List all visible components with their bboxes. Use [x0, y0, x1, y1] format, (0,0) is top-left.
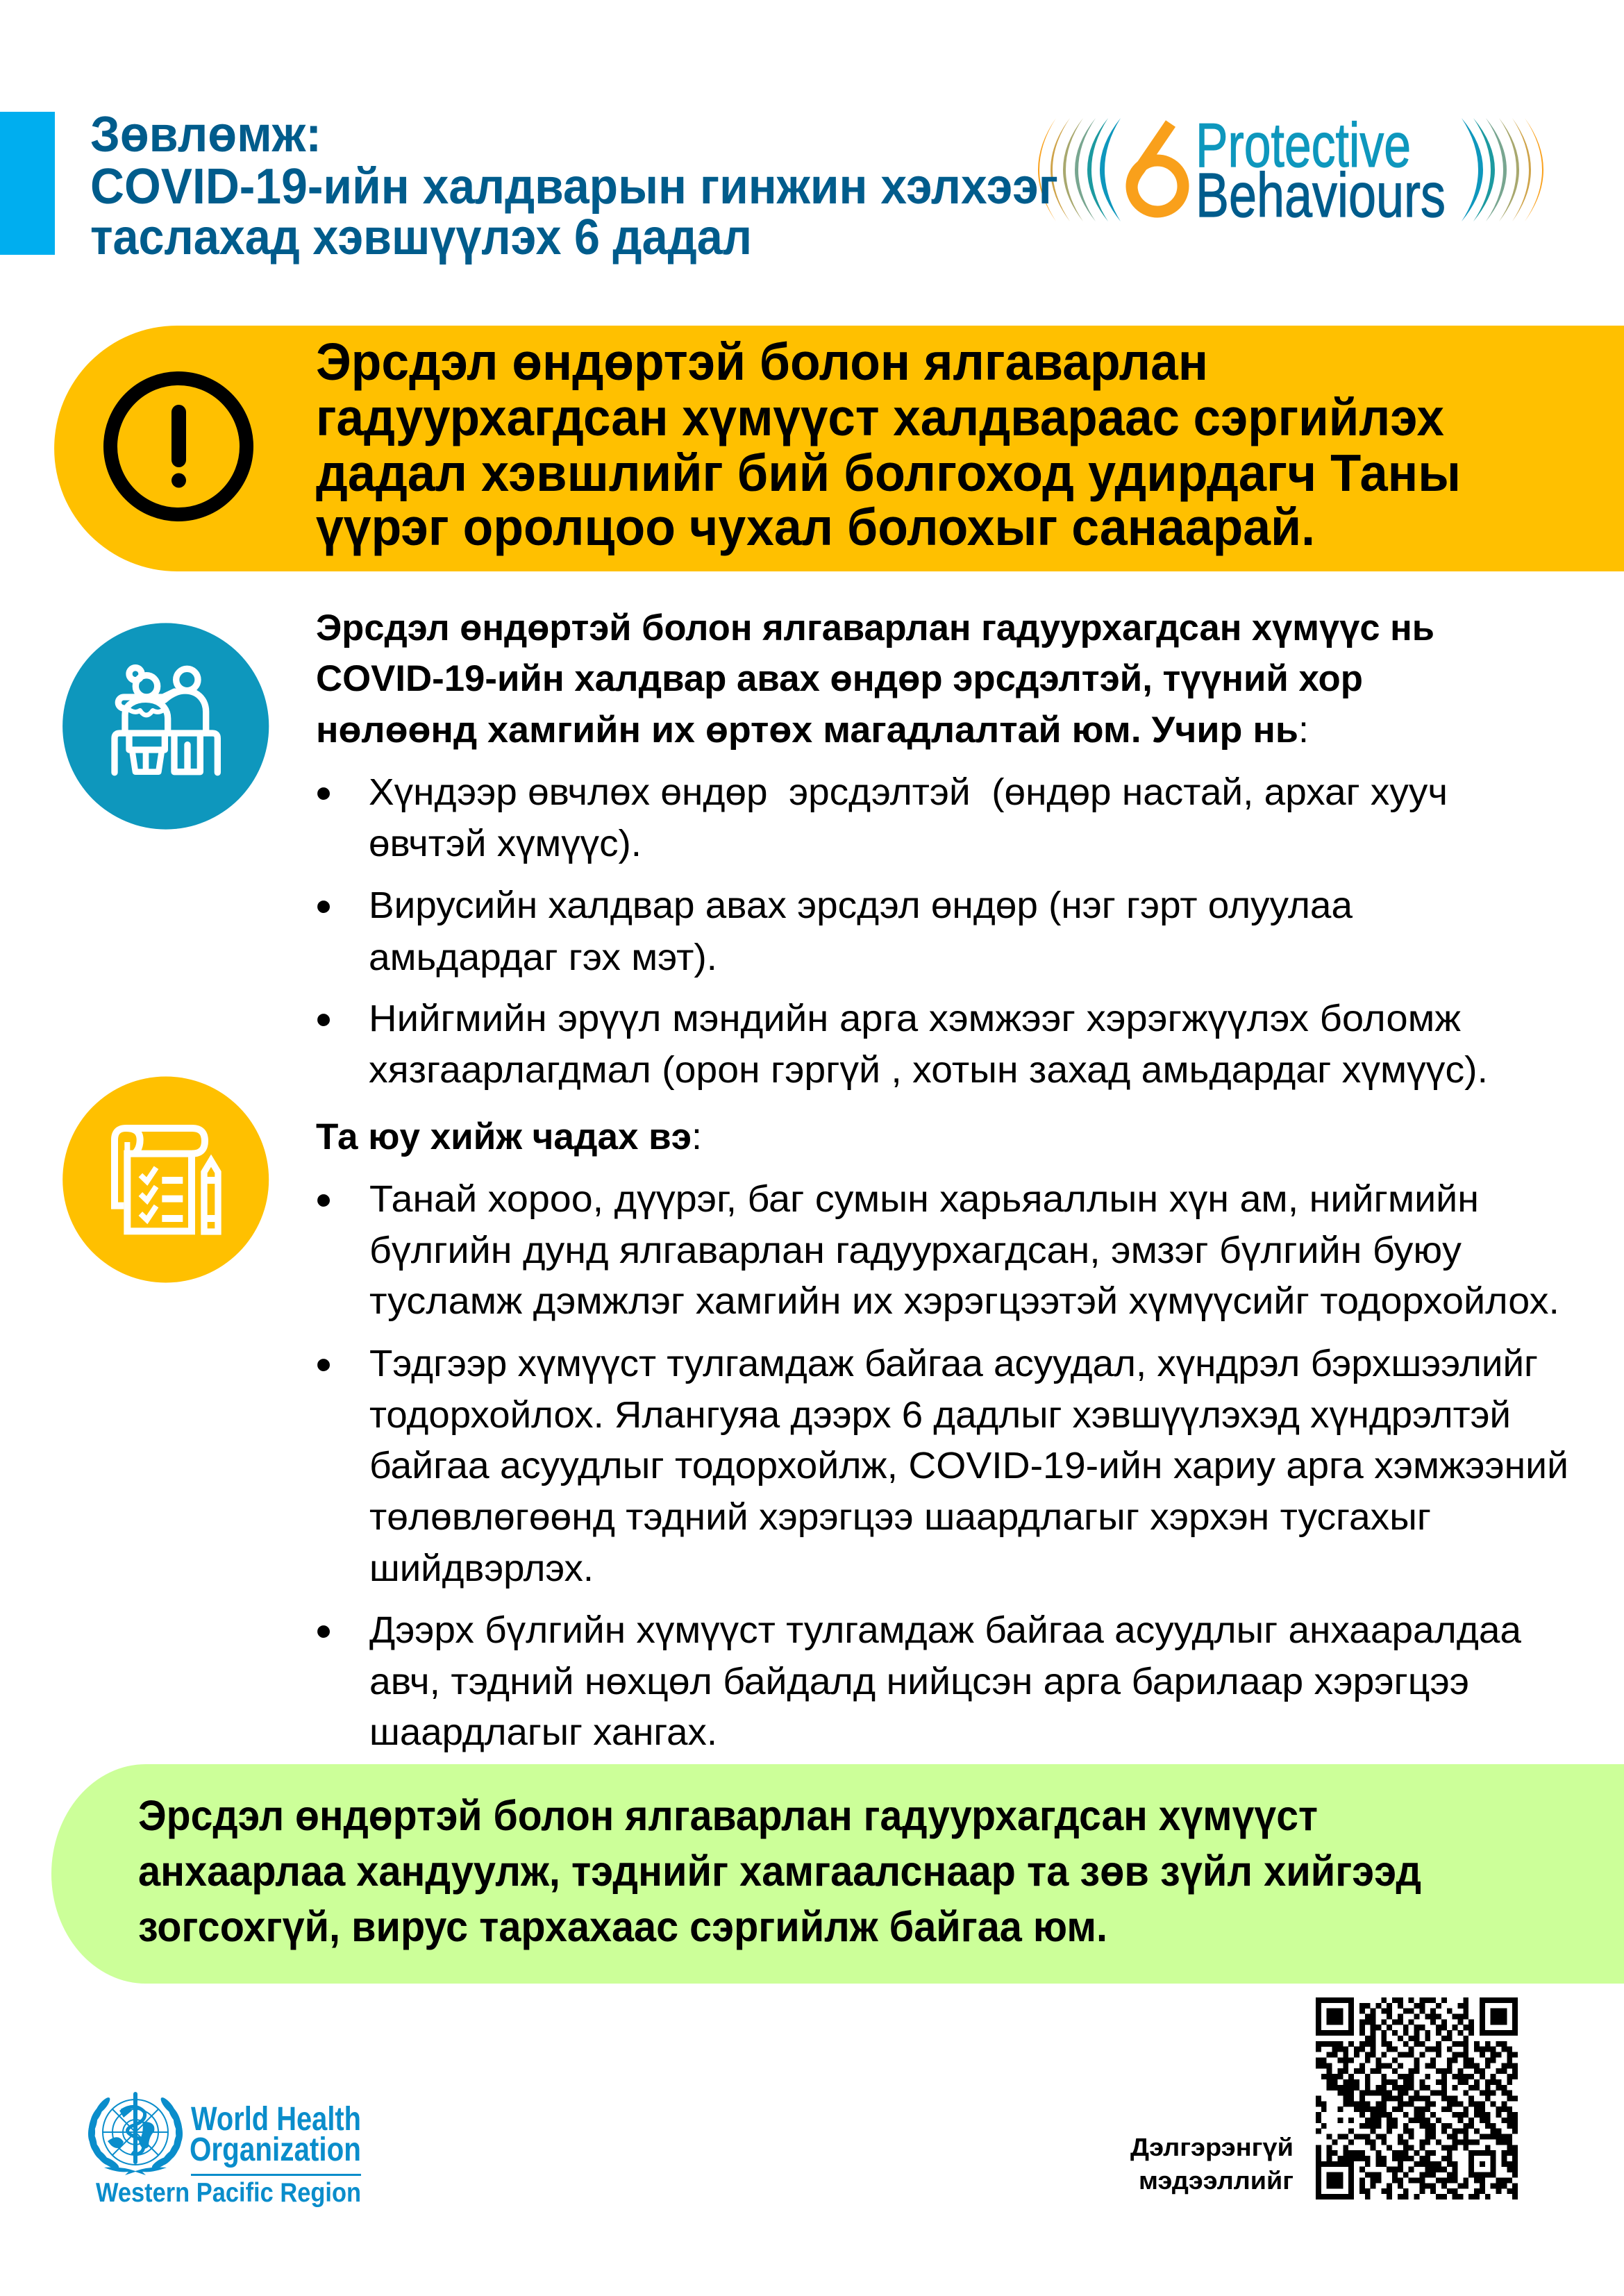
bullet list: actions: төлөвлөгөөнд тэдний хэрэгцээ шаардлагыг хэрхэн тусгахыг [369, 1496, 1431, 1538]
panel: green call to action [51, 1764, 1624, 1984]
bullet list: actions: • [315, 1605, 332, 1657]
bullet list: risk groups: өвчтэй хүмүүс). [369, 823, 642, 864]
logo: 6 Protective Behaviours: Protective [1196, 111, 1411, 181]
call to action text: зогсохгүй, вирус тархахаас сэргийлж байгаа юм. [138, 1903, 1107, 1950]
bullet list: actions: байгаа асуудлыг тодорхойлж, COVID-19-ийн хариу арга хэмжээний [369, 1445, 1568, 1486]
bullet list: actions: шаардлагыг хангах. [369, 1711, 717, 1753]
more information label: мэдээллийг [1139, 2166, 1294, 2195]
text block: why people are at risk: : [1298, 709, 1309, 751]
bullet list: risk groups: хязгаарлагдмал (орон гэргүй , хотын захад амьдардаг хүмүүс). [369, 1049, 1488, 1091]
bullet list: actions: бүлгийн дунд ялгаварлан гадуурхагдсан, эмзэг бүлгийн буюу [369, 1230, 1462, 1271]
panel: yellow warning banner [54, 326, 1624, 571]
right sound arcs [1462, 118, 1543, 221]
bullet list: actions: авч, тэдний нөхцөл байдалд нийцсэн арга барилаар хэрэгцээ [369, 1661, 1469, 1702]
bullet list: risk groups: амьдардаг гэх мэт). [369, 937, 717, 978]
logo: 6 Protective Behaviours: Behaviours [1196, 161, 1446, 231]
bullet list: actions: • [315, 1339, 332, 1390]
logo: 6 Protective Behaviours [1038, 111, 1543, 231]
banner text: дадал хэвшлийг бий болгоход удирдагч Таны [316, 444, 1461, 502]
heading: what you can do: Та юу хийж чадах вэ [316, 1116, 692, 1157]
numeral 6 [1132, 124, 1183, 212]
logo: World Health Organization [87, 2092, 361, 2208]
call to action text: Эрсдэл өндөртэй болон ялгаварлан гадуурхагдсан хүмүүст [138, 1792, 1318, 1839]
bullet list: actions: Тэдгээр хүмүүст тулгамдаж байгаа асуудал, хүндрэл бэрхшээлийг [369, 1343, 1538, 1384]
bullet list: actions: шийдвэрлэх. [369, 1548, 594, 1589]
WHO emblem [87, 2092, 184, 2175]
icon: exclamation mark [110, 378, 246, 514]
logo: World Health Organization: Western Pacific Region [96, 2178, 361, 2208]
bullet list: risk groups: • [315, 994, 332, 1045]
logo: World Health Organization: World Health [191, 2101, 361, 2138]
bullet list: risk groups: • [315, 767, 332, 819]
heading: what you can do: : [692, 1116, 702, 1157]
bullet list: actions [315, 1174, 1568, 1753]
banner text: үүрэг оролцоо чухал болохыг санаарай. [316, 498, 1315, 556]
bullet list: risk groups: Нийгмийн эрүүл мэндийн арга хэмжээг хэрэгжүүлэх боломж [369, 998, 1461, 1039]
logo: World Health Organization: Organization [190, 2131, 361, 2168]
bullet list: actions: Дээрх бүлгийн хүмүүст тулгамдаж байгаа асуудлыг анхааралдаа [369, 1609, 1522, 1651]
left sound arcs [1038, 118, 1121, 221]
bullet list: actions: тодорхойлох. Ялангуяа дээрх 6 дадлыг хэвшүүлэхэд хүндрэлтэй [369, 1394, 1511, 1436]
accent bar [0, 112, 55, 255]
title [90, 107, 1058, 265]
more information label: Дэлгэрэнгүй [1130, 2133, 1294, 2161]
call to action text: анхаарлаа хандуулж, тэднийг хамгаалснаар та зөв зүйл хийгээд [138, 1847, 1421, 1895]
icon: elderly couple [62, 623, 269, 830]
text block: why people are at risk [316, 607, 1434, 751]
text block: why people are at risk: COVID-19-ийн халдвар авах өндөр эрсдэлтэй, түүний хор [316, 658, 1363, 699]
bullet list: risk groups: • [315, 880, 332, 932]
bullet list: risk groups: Вирусийн халдвар авах эрсдэл өндөр (нэг гэрт олуулаа [369, 885, 1353, 926]
banner text: гадуурхагдсан хүмүүст халдвараас сэргийлэх [316, 388, 1444, 446]
text block: why people are at risk: Эрсдэл өндөртэй болон ялгаварлан гадуурхагдсан хүмүүс нь [316, 607, 1434, 648]
call to action text [138, 1792, 1421, 1950]
bullet list: risk groups [315, 767, 1488, 1091]
bullet list: actions: тусламж дэмжлэг хамгийн их хэрэгцээтэй хүмүүсийг тодорхойлох. [369, 1280, 1559, 1322]
title: Зөвлөмж: [90, 107, 321, 162]
bullet list: actions: • [315, 1174, 332, 1225]
more information label [1130, 2133, 1294, 2195]
bullet list: risk groups: Хүндээр өвчлөх өндөр эрсдэлтэй (өндөр настай, архаг хууч [369, 771, 1448, 813]
QR code [1316, 2000, 1518, 2197]
text block: why people are at risk: нөлөөнд хамгийн их өртөх магадлалтай юм. Учир нь [316, 710, 1298, 751]
title: таслахад хэвшүүлэх 6 дадал [90, 210, 752, 265]
banner text: Эрсдэл өндөртэй болон ялгаварлан [316, 333, 1208, 391]
title: COVID-19-ийн халдварын гинжин хэлхээг [90, 159, 1058, 215]
icon: checklist and pencil [62, 1076, 269, 1283]
bullet list: actions: Танай хороо, дүүрэг, баг сумын харьяаллын хүн ам, нийгмийн [369, 1178, 1479, 1220]
banner text [316, 333, 1461, 556]
